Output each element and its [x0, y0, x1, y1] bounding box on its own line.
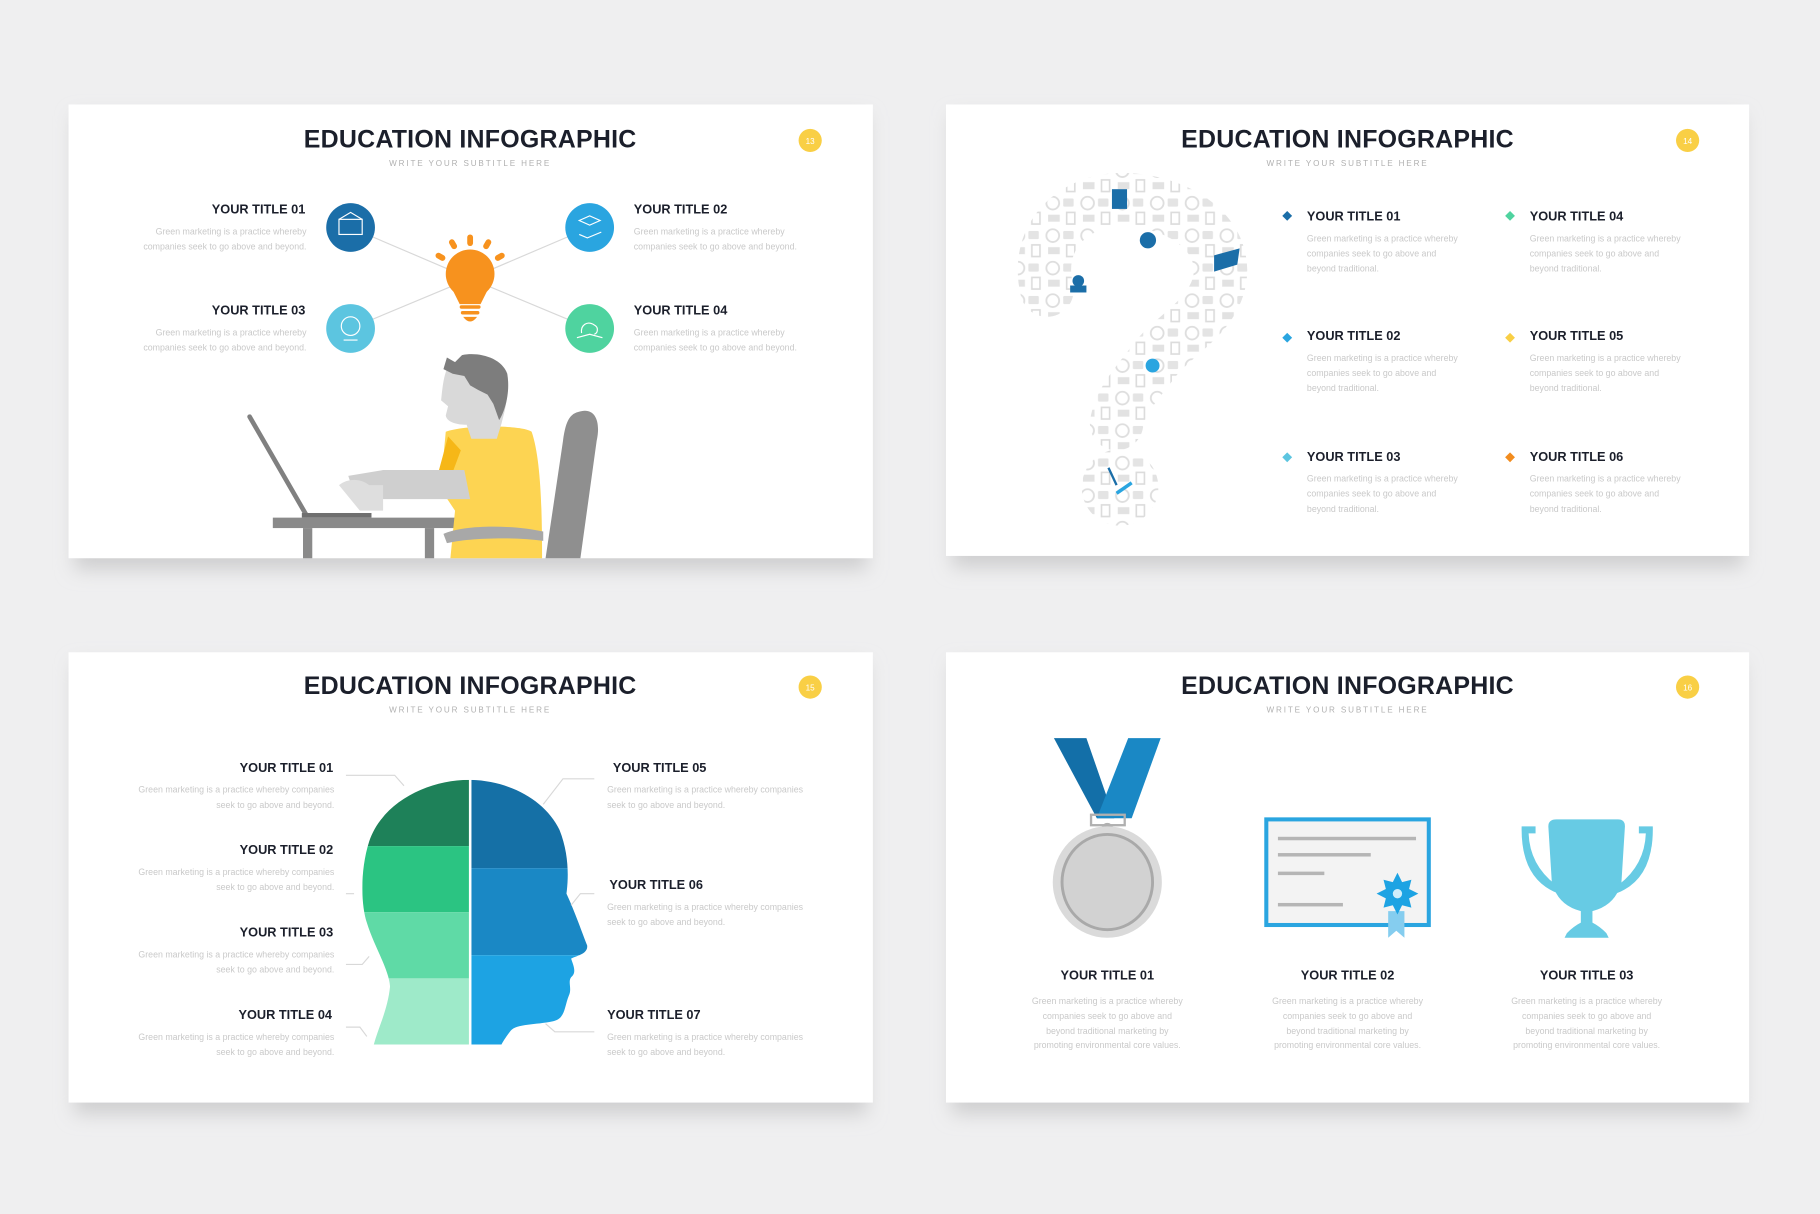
list item 02: Green marketing is a practice whereby: [1307, 353, 1458, 363]
subtitle: WRITE YOUR SUBTITLE HERE: [1267, 706, 1429, 715]
list item 03: companies seek to go above and: [1307, 489, 1436, 499]
icon: certificate: [1266, 819, 1429, 938]
text: title 02: [1272, 968, 1424, 1050]
list item 06: beyond traditional.: [1530, 504, 1602, 514]
icon: light bulb: [434, 234, 506, 321]
text: title 07: Green marketing is a practice whereby companies: [607, 1032, 804, 1042]
text: title 02: Green marketing is a practice whereby: [1272, 996, 1424, 1006]
text: title 05: seek to go above and beyond.: [607, 800, 725, 810]
list item 05: Green marketing is a practice whereby: [1530, 353, 1681, 363]
text: title 02: YOUR TITLE 02: [634, 202, 727, 217]
text: title 01: promoting environmental core values.: [1034, 1040, 1181, 1050]
text: title 04: [634, 303, 797, 353]
text: title 05: Green marketing is a practice whereby companies: [607, 785, 804, 795]
text: title 03: YOUR TITLE 03: [1540, 968, 1633, 983]
list item 01: YOUR TITLE 01: [1307, 209, 1400, 224]
list item 05: companies seek to go above and: [1530, 368, 1659, 378]
text: title 06: YOUR TITLE 06: [609, 877, 703, 892]
text: title 02: [138, 842, 335, 892]
list item 02: beyond traditional.: [1307, 383, 1379, 393]
text: title 02: Green marketing is a practice whereby companies: [138, 867, 335, 877]
list item 06: [1505, 449, 1681, 514]
text: title 04: seek to go above and beyond.: [216, 1047, 334, 1057]
text: title 02: Green marketing is a practice whereby: [634, 226, 785, 236]
panel: bottom-left head: [69, 652, 873, 1114]
page badge: 13: [806, 137, 815, 146]
text: title 03: Green marketing is a practice whereby: [156, 327, 307, 337]
text: title 01: Green marketing is a practice whereby companies: [138, 785, 335, 795]
text: title 01: beyond traditional marketing by: [1046, 1026, 1169, 1036]
subtitle: WRITE YOUR SUBTITLE HERE: [389, 159, 551, 168]
list item 04: companies seek to go above and: [1530, 248, 1659, 258]
text: title 06: Green marketing is a practice whereby companies: [607, 902, 804, 912]
list item 02: companies seek to go above and: [1307, 368, 1436, 378]
icon: circle 04: [565, 304, 614, 353]
list item 04: Green marketing is a practice whereby: [1530, 233, 1681, 243]
text: title 04: Green marketing is a practice whereby companies: [138, 1032, 335, 1042]
list item 03: beyond traditional.: [1307, 504, 1379, 514]
text: title 02: YOUR TITLE 02: [240, 842, 333, 857]
text: title 03: promoting environmental core values.: [1513, 1040, 1660, 1050]
icon: circle 01: [326, 203, 375, 252]
illustration: person at laptop: [250, 354, 598, 558]
text: title 04: YOUR TITLE 04: [634, 303, 728, 318]
list item 06: Green marketing is a practice whereby: [1530, 474, 1681, 484]
page badge: 16: [1683, 684, 1693, 693]
list item 05: [1505, 328, 1681, 393]
text: title 02: companies seek to go above and: [1283, 1011, 1412, 1021]
page badge: [799, 675, 822, 699]
text: title 04: Green marketing is a practice whereby: [634, 327, 785, 337]
list item 03: [1282, 449, 1458, 514]
text: title 01: Green marketing is a practice whereby: [1032, 996, 1183, 1006]
text: title 07: seek to go above and beyond.: [607, 1047, 725, 1057]
list item 01: companies seek to go above and: [1307, 248, 1436, 258]
text: title 01: [138, 760, 335, 810]
page badge: [1676, 129, 1699, 152]
text: title 02: seek to go above and beyond.: [216, 882, 334, 892]
text: title 03: YOUR TITLE 03: [240, 925, 333, 940]
text: title 05: [607, 760, 804, 810]
text: title 03: [1511, 968, 1663, 1050]
subtitle: WRITE YOUR SUBTITLE HERE: [1267, 159, 1429, 168]
list item 01: beyond traditional.: [1307, 264, 1379, 274]
subtitle: WRITE YOUR SUBTITLE HERE: [389, 706, 551, 715]
icon: medal: [1053, 738, 1162, 938]
text: title 07: [607, 1007, 804, 1057]
text: title 03: Green marketing is a practice whereby companies: [138, 950, 335, 960]
title: EDUCATION INFOGRAPHIC: [1181, 672, 1514, 700]
panel: top-left light bulb: [69, 104, 873, 570]
text: title 03: Green marketing is a practice whereby: [1511, 996, 1663, 1006]
icon: trophy: [1522, 819, 1653, 938]
list item 05: YOUR TITLE 05: [1530, 328, 1623, 343]
text: title 03: YOUR TITLE 03: [212, 303, 305, 318]
list item 05: beyond traditional.: [1530, 383, 1602, 393]
list item 06: companies seek to go above and: [1530, 489, 1659, 499]
icon: circle 03: [326, 304, 375, 353]
title: EDUCATION INFOGRAPHIC: [304, 125, 637, 153]
text: title 02: companies seek to go above and beyond.: [634, 242, 797, 252]
text: title 06: [607, 877, 804, 927]
icon: circle 02: [565, 203, 614, 252]
page badge: [799, 129, 822, 152]
panel: bottom-right awards: [946, 652, 1749, 1114]
panel: top-right question mark: [946, 104, 1749, 568]
page badge: 14: [1683, 137, 1693, 146]
list item 02: YOUR TITLE 02: [1307, 328, 1400, 343]
text: title 01: companies seek to go above and: [1043, 1011, 1172, 1021]
list item 02: [1282, 328, 1458, 393]
text: title 01: [143, 202, 307, 252]
text: title 02: beyond traditional marketing by: [1286, 1026, 1409, 1036]
text: title 03: [143, 303, 307, 353]
page badge: 15: [806, 684, 815, 693]
text: title 01: YOUR TITLE 01: [240, 760, 333, 775]
text: title 03: companies seek to go above and: [1522, 1011, 1651, 1021]
text: title 04: companies seek to go above and beyond.: [634, 343, 797, 353]
text: title 05: YOUR TITLE 05: [613, 760, 706, 775]
icon cluster: question mark: [1044, 189, 1240, 526]
list item 04: [1505, 209, 1681, 274]
list item 06: YOUR TITLE 06: [1530, 449, 1623, 464]
connector lines: [351, 227, 590, 328]
page badge: [1676, 675, 1699, 699]
text: title 07: YOUR TITLE 07: [607, 1007, 701, 1022]
text: title 02: YOUR TITLE 02: [1301, 968, 1394, 983]
text: title 01: seek to go above and beyond.: [216, 800, 334, 810]
text: title 01: YOUR TITLE 01: [1061, 968, 1154, 983]
text: title 04: [138, 1007, 335, 1057]
title: EDUCATION INFOGRAPHIC: [1181, 125, 1514, 153]
list item 04: YOUR TITLE 04: [1530, 209, 1624, 224]
head chart: right blue half: [471, 778, 599, 1045]
text: title 03: beyond traditional marketing by: [1525, 1026, 1648, 1036]
list item 04: beyond traditional.: [1530, 264, 1602, 274]
text: title 01: Green marketing is a practice whereby: [156, 226, 307, 236]
connector lines: [346, 775, 594, 1036]
text: title 06: seek to go above and beyond.: [607, 917, 725, 927]
list item 03: Green marketing is a practice whereby: [1307, 474, 1458, 484]
text: title 01: companies seek to go above and beyond.: [143, 242, 306, 252]
list item 01: Green marketing is a practice whereby: [1307, 233, 1458, 243]
text: title 03: seek to go above and beyond.: [216, 965, 334, 975]
list item 03: YOUR TITLE 03: [1307, 449, 1400, 464]
text: title 03: companies seek to go above and beyond.: [143, 343, 306, 353]
text: title 02: [634, 202, 797, 252]
title: EDUCATION INFOGRAPHIC: [304, 672, 637, 700]
head chart: left green half: [362, 780, 469, 1044]
list item 01: [1282, 209, 1458, 274]
text: title 02: promoting environmental core values.: [1274, 1040, 1421, 1050]
text: title 04: YOUR TITLE 04: [238, 1007, 333, 1022]
text: title 03: [138, 925, 335, 975]
text: title 01: [1032, 968, 1183, 1050]
text: title 01: YOUR TITLE 01: [212, 202, 305, 217]
